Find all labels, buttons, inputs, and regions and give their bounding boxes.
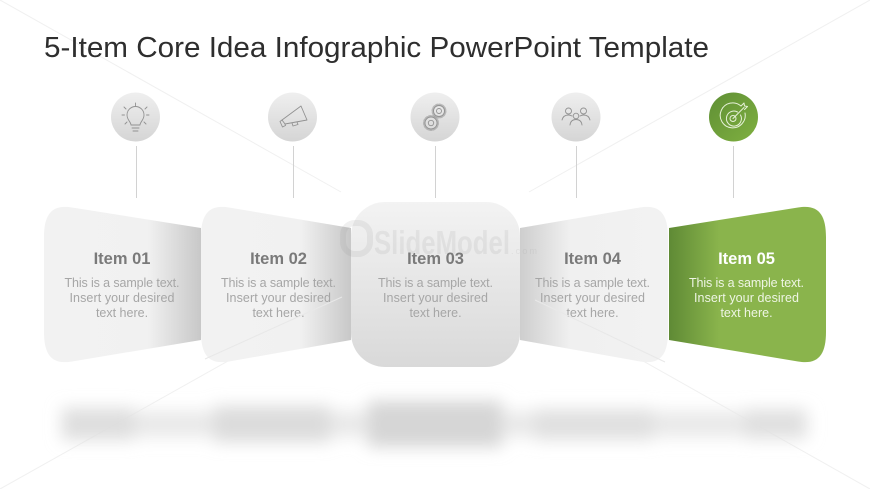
item 03 text: Insert your desired: [383, 291, 488, 305]
watermark: SlideModel: [374, 224, 510, 261]
item 01 text: [64, 250, 180, 320]
item 02 text: Insert your desired: [226, 291, 331, 305]
node 1: lightbulb icon with connector: [111, 92, 160, 198]
icon: megaphone: [280, 106, 307, 127]
panel: item 05: [669, 207, 826, 362]
item 03 text: [378, 250, 493, 320]
item 03 text: Item 03: [407, 250, 464, 268]
item 04 text: Item 04: [564, 250, 622, 268]
item 02 text: [221, 250, 336, 320]
title: 5-Item Core Idea Infographic PowerPoint Template: [44, 32, 709, 64]
item 01 text: Insert your desired: [70, 291, 175, 305]
item 02 text: text here.: [252, 306, 305, 320]
item 05 text: text here.: [720, 306, 773, 320]
panel: item 04: [520, 207, 668, 362]
item 03 text: text here.: [409, 306, 462, 320]
item 01 text: Item 01: [94, 250, 150, 268]
item 04 text: text here.: [566, 306, 619, 320]
item 05 text: [689, 250, 804, 320]
node 3: gears icon with connector: [410, 92, 460, 198]
item 02 text: This is a sample text.: [221, 276, 336, 290]
panel: item 01: [44, 207, 201, 362]
item 01 text: text here.: [96, 306, 148, 320]
icon: target: [720, 103, 748, 128]
node 5: target icon with connector: [709, 92, 758, 198]
item 05 text: This is a sample text.: [689, 276, 804, 290]
item 04 text: Insert your desired: [540, 291, 645, 305]
panel: item 03: [351, 202, 520, 367]
item 03 text: This is a sample text.: [378, 276, 493, 290]
item 02 text: Item 02: [250, 250, 307, 268]
watermark: .com: [511, 246, 537, 256]
icon: people: [562, 108, 590, 125]
item 05 text: Insert your desired: [694, 291, 799, 305]
foreground diagonal lines over cards: [205, 297, 665, 362]
node 4: people icon with connector: [552, 92, 600, 198]
item 05 text: Item 05: [718, 250, 775, 268]
icon: lightbulb: [122, 103, 149, 131]
item 01 text: This is a sample text.: [64, 276, 180, 290]
item 04 text: [535, 250, 650, 320]
item 04 text: This is a sample text.: [535, 276, 650, 290]
node 2: megaphone icon with connector: [268, 92, 317, 198]
panel: item 02: [201, 207, 351, 362]
blurred floor shadow: [62, 401, 808, 447]
icon: gears: [424, 104, 446, 130]
